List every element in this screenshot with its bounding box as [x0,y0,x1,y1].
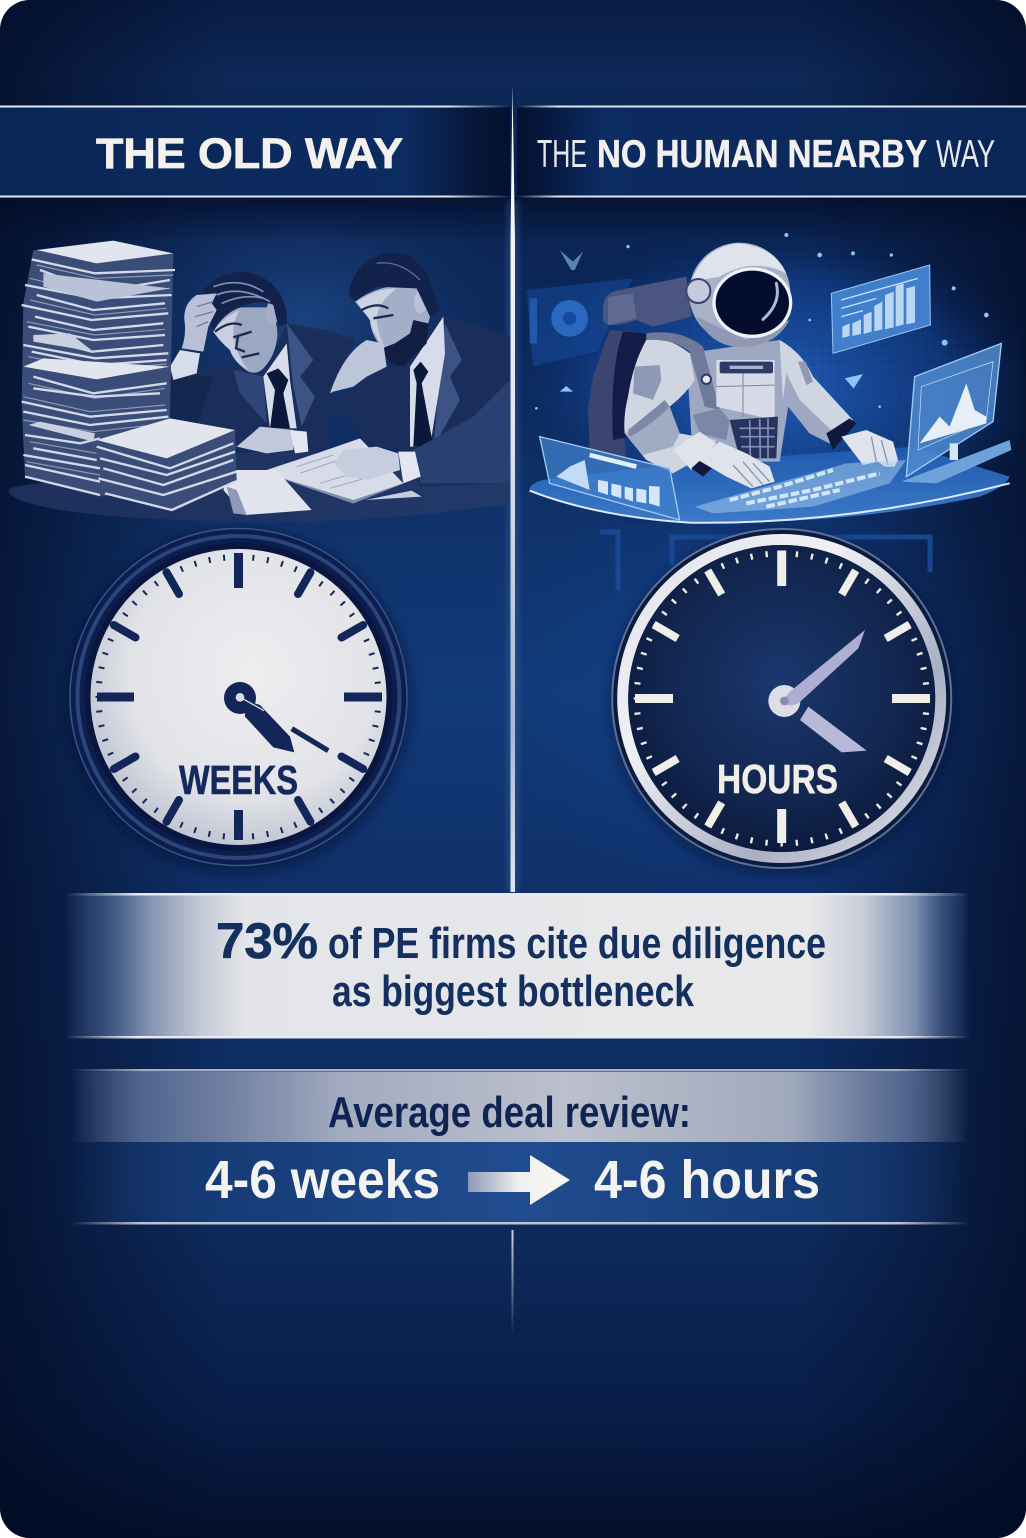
man two [330,253,510,487]
chair [588,277,691,460]
lower divider [512,1230,514,1335]
table [8,447,510,522]
floating bar chart panel [831,265,930,353]
clock ticks [97,553,382,840]
weeks value: 4-6 weeks [205,1150,440,1210]
panel: old way header [0,106,510,198]
clock hands [224,682,329,752]
heading: the no human nearby way: WAY [936,133,995,176]
clock hands [768,630,867,752]
small paper stack [97,418,237,512]
label text: Average deal review: [328,1088,691,1137]
line chart monitor [901,343,1011,483]
stat text: as biggest bottleneck [332,967,694,1016]
illustration: stressed businessmen with paper stacks [8,241,510,522]
stat text: of PE firms cite due diligence [328,919,826,968]
arrow [468,1155,570,1205]
astronaut [624,332,898,488]
center divider [506,85,520,892]
stat text [216,913,826,1016]
clock ticks [635,550,930,843]
tall paper stack [22,241,175,497]
documents on table [223,438,422,515]
floating sparks [535,233,989,410]
helmet [686,243,792,347]
desk [530,447,1010,523]
heading: the old way: THE OLD WAY [96,130,403,178]
heading: the no human nearby way: NO HUMAN NEARBY [597,133,927,176]
man one [167,272,355,453]
clock label: hours: HOURS [717,756,838,802]
callout: average deal review [70,1069,970,1224]
desk hologram map [695,460,906,513]
stat text: 73% [216,913,318,969]
panel: no human nearby header [517,106,1026,198]
clock: hours [610,529,954,875]
clock label: weeks: WEEKS [179,757,298,803]
heading: the no human nearby way: THE [537,133,587,176]
left holographic panel [540,437,680,520]
resting hands [237,427,421,483]
background hologram screen [526,278,633,367]
clock: weeks [67,528,411,873]
illustration: astronaut at holographic desk [526,233,1025,524]
hours value: 4-6 hours [594,1150,820,1210]
callout: 73 percent stat [65,893,970,1038]
desk legs behind hours clock [600,532,930,590]
